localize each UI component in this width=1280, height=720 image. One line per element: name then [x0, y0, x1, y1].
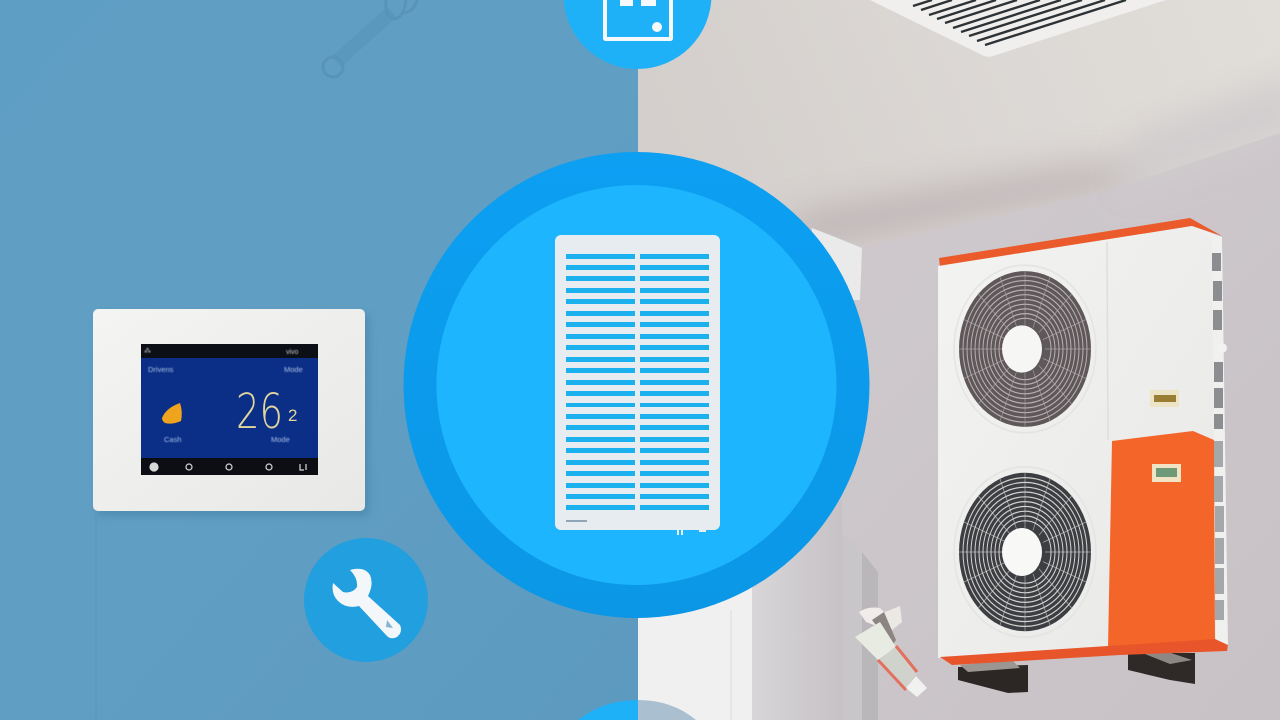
status bar text: ⁂	[144, 347, 151, 355]
green display label	[1152, 464, 1181, 482]
unit top orange edge	[939, 218, 1222, 267]
temperature unit mark: 2	[288, 406, 297, 425]
grille small marks	[566, 520, 706, 535]
panel: room right background	[638, 0, 1280, 720]
top fan	[954, 265, 1096, 433]
right wall bracket	[1128, 646, 1195, 684]
screen labels: Cash	[164, 435, 182, 444]
unit bottom orange edge	[940, 639, 1228, 665]
bottom circle	[578, 700, 696, 720]
status bar text: vivo	[286, 349, 299, 356]
ghost wrench icon	[323, 0, 417, 77]
thermostat	[93, 309, 369, 516]
outer ring	[404, 152, 870, 618]
top circle icon	[564, 0, 712, 69]
outdoor heat pump unit	[938, 218, 1228, 693]
thermostat frame	[93, 309, 365, 511]
unit side vents strip	[1190, 225, 1228, 650]
screen bottom icons	[150, 463, 306, 471]
icon: small tool	[855, 606, 927, 697]
thermostat screen	[141, 344, 318, 475]
icon: square control panel	[603, 0, 673, 41]
screen labels: Drivens	[148, 365, 174, 374]
gold rating plate	[1150, 390, 1179, 407]
bottom fan	[954, 467, 1096, 637]
temperature reading: 26	[236, 384, 283, 440]
icon: orange leaf	[162, 403, 182, 424]
screen labels: Mode	[271, 435, 290, 444]
left wall bracket	[958, 660, 1028, 693]
side vent slots	[1212, 253, 1224, 620]
air vent grille icon	[555, 235, 720, 535]
unit right panel seam	[1107, 242, 1108, 440]
screen labels: Mode	[284, 365, 303, 374]
inner disc	[436, 185, 836, 585]
side connector	[1217, 343, 1227, 353]
central filter badge	[404, 152, 870, 618]
screen labels	[148, 365, 303, 444]
panel: blue left background	[0, 0, 638, 720]
unit front panel	[938, 226, 1216, 658]
wrench glyph	[333, 569, 401, 638]
status bar text	[144, 347, 299, 356]
icon: wrench button	[304, 538, 428, 662]
ceiling vent	[870, 0, 1166, 57]
orange service panel	[1108, 431, 1215, 647]
